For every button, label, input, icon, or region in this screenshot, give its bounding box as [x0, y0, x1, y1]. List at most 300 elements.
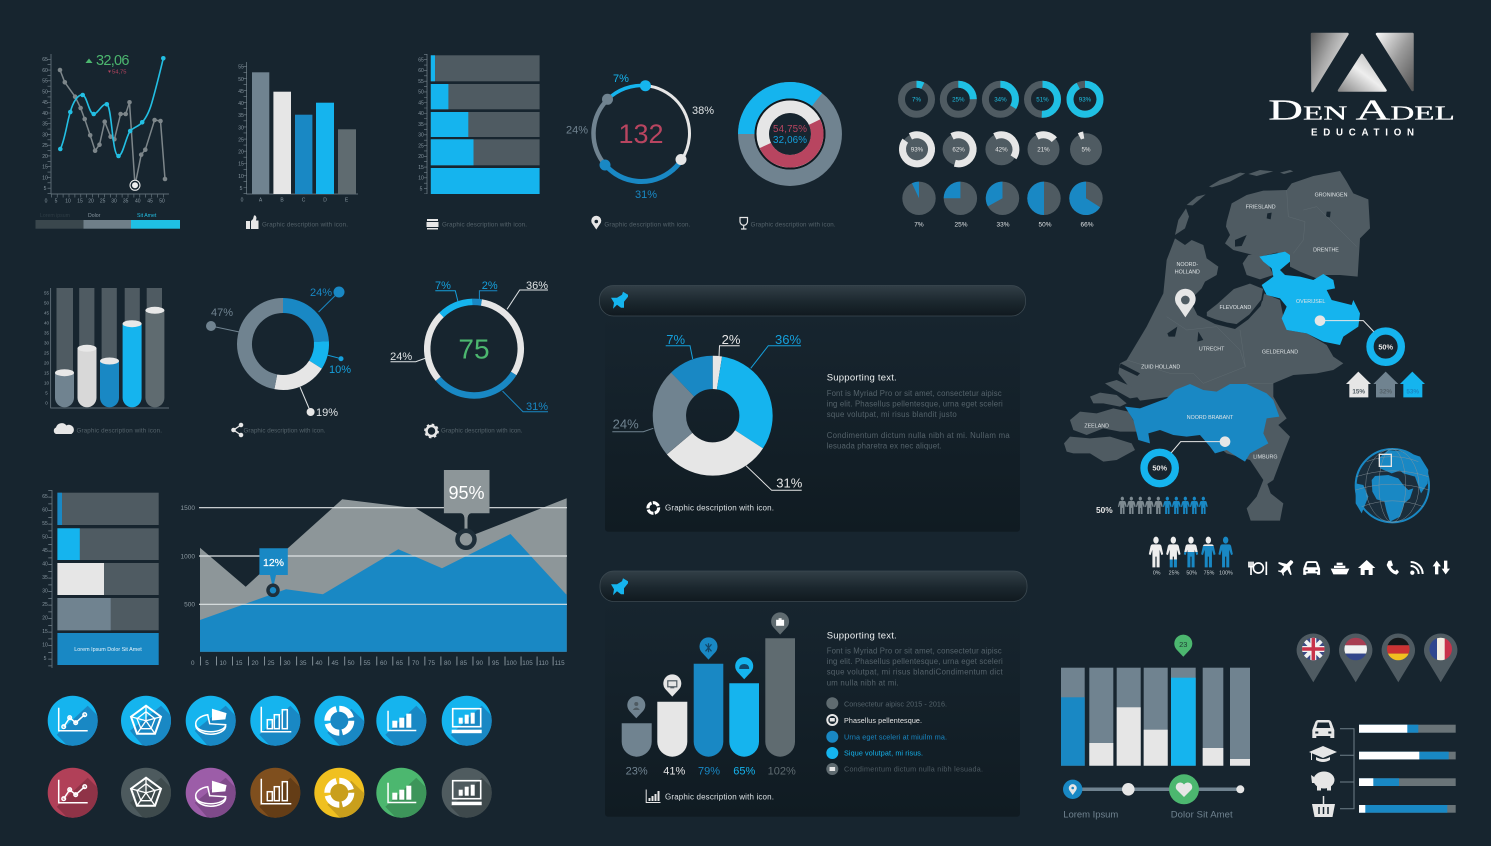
province labels: FLEVOLAND: [1219, 305, 1251, 311]
supporting body: ing elit. Phasellus pellentesque, urna eget sceleri: [827, 657, 1003, 666]
y labels: [238, 65, 349, 204]
pie labels: 33%: [996, 222, 1010, 228]
icon: globe: [1356, 449, 1429, 522]
x axis labels: 50: [159, 198, 165, 204]
y labels: E: [345, 198, 349, 204]
caption: Graphic description with icon.: [441, 427, 523, 434]
y labels: 40: [238, 101, 244, 107]
y labels: 40: [42, 562, 48, 568]
icon: car: [1303, 561, 1320, 575]
zeeland islands: [1064, 380, 1142, 462]
x labels: 55: [363, 660, 371, 667]
donut labels: 36%: [775, 332, 801, 347]
y labels: 20: [418, 154, 424, 160]
donut labels: 24%: [613, 416, 639, 432]
y labels: 55: [238, 65, 244, 71]
y axis labels: 45: [42, 100, 48, 106]
lakes: [1119, 212, 1331, 376]
y labels: D: [323, 198, 327, 204]
legend: Sit Amet: [137, 213, 157, 219]
bars: [252, 72, 356, 194]
icon: cloud: [54, 423, 74, 434]
panel: area chart: [181, 470, 568, 667]
y axis labels: 20: [42, 154, 48, 160]
panel: double ring: [740, 90, 836, 229]
value up: 32,06: [96, 53, 130, 69]
pies: [902, 182, 1103, 215]
dial labels: 62%: [952, 146, 965, 154]
icon: phone: [1387, 560, 1399, 575]
y labels: 1500: [181, 505, 195, 512]
donut: [651, 354, 774, 477]
panel: donut with callouts: [206, 286, 351, 437]
grey area: [200, 498, 567, 652]
x axis labels: 5: [55, 198, 58, 204]
flag pin: Germany: [1382, 633, 1415, 682]
supporting body: lesuada pharetra ex nec aliquet.: [827, 441, 942, 450]
panel: cylinder chart: [44, 288, 169, 434]
panel: icon buttons colored row: [48, 768, 492, 818]
bar: savings: [1359, 778, 1456, 786]
province labels: UTRECHT: [1199, 346, 1225, 352]
bar pins: [627, 612, 789, 718]
province labels: OVERIJSEL: [1296, 299, 1325, 305]
header pill: [600, 571, 1027, 602]
y labels: 25: [42, 602, 48, 608]
bracket: [1340, 729, 1354, 809]
province borders: [1127, 190, 1357, 383]
icon: calendar: [426, 219, 438, 230]
y labels: 55: [418, 79, 424, 85]
icon: bar chart green: [376, 768, 426, 818]
y labels: 25: [44, 350, 49, 356]
icon: bars: [646, 790, 660, 803]
callout: 95%: 95%: [448, 483, 485, 503]
wadden islands: [1175, 170, 1293, 235]
province labels: HOLLAND: [1175, 270, 1200, 276]
grid lines: [199, 508, 567, 604]
panel: horizontal progress bars: [418, 54, 540, 230]
y labels: 0: [45, 400, 48, 406]
axis: [51, 288, 169, 408]
center value: 75: [458, 334, 490, 364]
icon: monitor: [442, 696, 492, 746]
cylinders: [55, 307, 164, 407]
y labels: 5: [45, 390, 48, 396]
ring labels: 24%: [566, 124, 588, 136]
y labels: 10: [238, 174, 244, 180]
x labels: 105: [522, 660, 533, 667]
cyan ring labels: 7%: [912, 96, 921, 104]
y labels: 15: [238, 162, 244, 168]
globe marker: [1379, 454, 1391, 466]
x axis labels: 40: [135, 198, 141, 204]
logo tagline: EDUCATION: [1311, 128, 1414, 138]
supporting heading: Supporting text.: [827, 630, 897, 641]
cyan rings: [902, 84, 1100, 114]
x labels: [191, 660, 565, 667]
x ticks: [200, 656, 568, 666]
y labels: 10: [418, 176, 424, 182]
icon: bar chart: [376, 696, 426, 746]
bar: education: [1359, 752, 1456, 759]
panel: map of the Netherlands: [1064, 170, 1450, 576]
globe land: [1356, 450, 1428, 522]
people row: [1118, 497, 1208, 514]
y labels: 45: [238, 89, 244, 95]
noordoostpolder: [1243, 253, 1273, 279]
icon: bars brown: [250, 768, 300, 818]
marker: [130, 180, 140, 190]
ring labels: 7%: [435, 280, 451, 292]
legend: Lorem ipsum: [40, 213, 70, 219]
icon: thumb up: [246, 215, 258, 229]
inner ring: [754, 98, 826, 170]
x axis labels: [45, 198, 165, 204]
logo: [1268, 34, 1455, 138]
icon: cutlery: [1249, 562, 1266, 575]
panel: stacked columns with timeline: [1061, 635, 1250, 821]
x labels: 85: [460, 660, 467, 667]
caption: Graphic description with icon.: [665, 504, 774, 513]
timeline labels: Lorem Ipsum: [1063, 810, 1118, 821]
timeline heart marker: [1169, 774, 1199, 804]
callout: noord brabant: 50%: [1152, 464, 1167, 473]
axis: [245, 62, 358, 194]
caption: Graphic description with icon.: [244, 427, 326, 434]
y labels: 45: [418, 100, 424, 106]
pie labels: 50%: [1038, 222, 1052, 228]
header pill: [600, 286, 1026, 316]
ring dots: [600, 80, 686, 170]
callout labels: 19%: [316, 407, 338, 419]
y labels: 25: [238, 138, 244, 144]
y labels: 30: [418, 132, 424, 138]
dial labels: 93%: [911, 146, 924, 154]
pie labels: 7%: [914, 222, 924, 228]
x labels: 30: [283, 660, 291, 667]
people progress labels: 25%: [1169, 570, 1180, 576]
panel: stacked progress rows: [42, 490, 159, 668]
y labels: 40: [418, 111, 424, 117]
logo name: DEN ADEL: [1268, 94, 1455, 126]
y labels: 35: [44, 330, 49, 336]
x labels: 80: [444, 660, 451, 667]
icon: up down arrows: [1433, 561, 1450, 574]
icon: car: [1312, 720, 1334, 738]
supporting body: [827, 389, 1010, 450]
caption: Graphic description with icon.: [604, 221, 691, 228]
icon: radar grey: [121, 768, 171, 818]
supporting body: Font is Myriad Pro or sit amet, consectetur aipisc: [827, 647, 1002, 656]
province labels: GRONINGEN: [1315, 193, 1348, 199]
western and central provinces: [1118, 238, 1343, 521]
y labels: 65: [42, 494, 48, 500]
noord brabant: [1125, 384, 1279, 462]
chart axes: [49, 54, 169, 196]
callout labels: [211, 287, 351, 419]
x labels: 5: [205, 660, 209, 667]
province labels: ZEELAND: [1084, 424, 1109, 430]
panel: category progress bars: [1309, 720, 1456, 817]
y labels: A: [259, 198, 263, 204]
x axis labels: 35: [123, 198, 129, 204]
overijssel: [1259, 252, 1360, 345]
pie labels: 66%: [1080, 222, 1094, 228]
cyan ring labels: 93%: [1079, 96, 1092, 104]
bar values: 41%: [663, 766, 686, 778]
x axis labels: 0: [45, 198, 48, 204]
supporting body: sque volutpat, mi risus blandit justo: [827, 410, 957, 419]
ring labels: 38%: [692, 105, 714, 117]
x labels: 110: [538, 660, 549, 667]
flag pin: France: [1424, 633, 1457, 682]
icon: gear: [425, 424, 438, 438]
white arc dials: [897, 130, 1106, 169]
province labels: NOORD BRABANT: [1187, 415, 1234, 421]
y axis labels: 40: [42, 111, 48, 117]
icon: graduation cap: [1309, 746, 1337, 762]
panel: country flag pins: [1297, 633, 1457, 682]
legend list: Condimentum dictum nulla nibh lesuada.: [844, 764, 983, 774]
y labels: 30: [42, 588, 48, 594]
column fills: [1061, 678, 1250, 766]
icon: donut yellow: [314, 768, 364, 818]
y axis labels: 35: [42, 122, 48, 128]
supporting heading: Supporting text.: [827, 373, 897, 384]
flag pin: UK: [1297, 633, 1330, 682]
center values: [773, 124, 807, 146]
grey data line: [58, 68, 167, 185]
globe grid: [1356, 449, 1429, 522]
x labels: 40: [315, 660, 323, 667]
panel: line chart: [36, 53, 180, 229]
blue area: [200, 534, 567, 652]
y axis labels: 50: [42, 89, 48, 95]
green pin: 23: [1179, 640, 1187, 649]
province labels: ZUID HOLLAND: [1141, 364, 1180, 370]
x labels: 10: [219, 660, 227, 667]
houses: 15%: [1352, 389, 1365, 396]
x axis labels: 30: [111, 198, 117, 204]
x labels: 70: [412, 660, 419, 667]
province labels: GELDERLAND: [1262, 350, 1298, 356]
y labels: 20: [44, 360, 49, 366]
y labels: B: [280, 198, 284, 204]
y labels: 20: [42, 616, 48, 622]
caption: Graphic description with icon.: [442, 221, 527, 228]
rows: [57, 493, 159, 665]
people progress labels: 100%: [1219, 570, 1233, 576]
ring: [408, 283, 540, 415]
y axis labels: 65: [42, 57, 48, 63]
green pin: [1174, 635, 1192, 657]
y labels: 50: [42, 534, 48, 540]
houses: [1346, 372, 1425, 397]
ring labels: 31%: [635, 189, 657, 201]
y labels: 55: [44, 290, 49, 296]
cyan ring labels: [912, 96, 1092, 104]
bar values: 79%: [698, 766, 720, 778]
bars: [431, 55, 540, 194]
y labels: 15: [418, 165, 424, 171]
ring labels: [566, 73, 714, 201]
dial labels: 42%: [995, 146, 1008, 154]
y labels: 5: [44, 656, 47, 662]
donut leader lines: [612, 346, 802, 490]
people row label: 50%: [1096, 505, 1113, 515]
callout labels: 10%: [329, 364, 351, 376]
icon: pie purple: [186, 768, 236, 818]
ring labels: 31%: [526, 401, 548, 413]
y axis labels: 60: [42, 68, 48, 74]
ring labels: 36%: [526, 280, 548, 292]
y labels: 50: [238, 77, 244, 83]
y labels: 5: [420, 186, 423, 192]
y labels: 15: [42, 629, 48, 635]
y labels: 500: [184, 602, 195, 609]
y labels: 35: [238, 113, 244, 119]
icon: bars: [250, 696, 300, 746]
x labels: 65: [396, 660, 403, 667]
y labels: 60: [418, 68, 424, 74]
x labels: 35: [299, 660, 307, 667]
icon: line chart red: [48, 768, 98, 818]
panel background: [605, 601, 1020, 817]
supporting body: ing elit. Phasellus pellentesque, urna eget sceleri: [827, 399, 1003, 408]
icon: plane: [1278, 560, 1293, 576]
supporting body: [827, 647, 1004, 687]
icon: rss: [1411, 562, 1423, 574]
x labels: 20: [251, 660, 259, 667]
y axis labels: 30: [42, 132, 48, 138]
bar values: 65%: [733, 766, 756, 778]
x axis labels: 10: [65, 198, 71, 204]
ring labels: 24%: [390, 351, 412, 363]
y labels: 45: [44, 310, 49, 316]
cyan ring labels: 51%: [1036, 96, 1049, 104]
flag pin: Netherlands: [1339, 633, 1372, 682]
bar values: [626, 766, 796, 778]
y axis labels: [42, 57, 48, 192]
icon: ship: [1331, 563, 1349, 574]
people progress labels: [1153, 570, 1233, 576]
donut: [230, 291, 336, 397]
x labels: 25: [267, 660, 275, 667]
x axis labels: 45: [147, 198, 153, 204]
y labels: 0: [241, 198, 244, 204]
legend list: [826, 697, 983, 775]
province labels: FRIESLAND: [1246, 204, 1276, 210]
y labels: 35: [418, 122, 424, 128]
panel: pill bars with supporting text: [600, 571, 1027, 817]
caption: Graphic description with icon.: [665, 792, 774, 801]
callout: noord brabant: [1144, 436, 1230, 484]
y labels: 25: [418, 143, 424, 149]
icon: pin: [611, 578, 628, 595]
bar: shopping: [1359, 805, 1456, 813]
y labels: 40: [44, 320, 49, 326]
caption: Graphic description with icon.: [76, 427, 162, 434]
y labels: [44, 290, 49, 406]
supporting body: sque volutpat, mi risus blandiCondimentum dict: [827, 667, 1004, 676]
panel background: [605, 316, 1020, 532]
icon: basket: [1312, 796, 1335, 817]
flevoland: [1206, 283, 1264, 325]
x labels: 100: [506, 660, 517, 667]
pie labels: 25%: [954, 222, 968, 228]
icon: monitor grey: [442, 768, 492, 818]
dial labels: 21%: [1037, 146, 1050, 154]
province labels: NOORD-: [1177, 262, 1198, 268]
panel: small progress rings: [897, 84, 1106, 228]
x labels: 115: [555, 660, 565, 667]
bars: [622, 638, 795, 757]
y labels: 10: [44, 380, 49, 386]
globe ocean: [1356, 449, 1429, 522]
bar values: 102%: [768, 766, 796, 778]
icon: piggy bank: [1311, 772, 1334, 790]
callout dots: [206, 286, 344, 416]
x axis labels: 15: [77, 198, 83, 204]
y axis labels: 10: [42, 175, 48, 181]
y labels: 30: [44, 340, 49, 346]
supporting body: um nulla nibh at mi.: [827, 678, 899, 687]
callout: 95%: [444, 470, 490, 548]
callout labels: 47%: [211, 307, 233, 319]
panel: icon buttons blue row: [48, 696, 492, 746]
x labels: 60: [380, 660, 387, 667]
panel: donut with supporting text: [600, 286, 1026, 532]
icon: line chart: [48, 696, 98, 746]
x labels: 95: [492, 660, 499, 667]
donut labels: [613, 332, 803, 490]
supporting body: Font is Myriad Pro or sit amet, consectetur aipisc: [827, 389, 1002, 398]
panel: 75 ring: [390, 280, 548, 438]
x labels: 90: [476, 660, 483, 667]
y labels: 10: [42, 642, 48, 648]
houses: 53%: [1406, 389, 1419, 396]
x labels: 50: [347, 660, 355, 667]
x axis labels: 20: [88, 198, 94, 204]
callout: overijssel: [1315, 315, 1401, 362]
north-east provinces: [1225, 171, 1370, 278]
x axis labels: 25: [100, 198, 106, 204]
caption: Graphic description with icon.: [751, 221, 836, 228]
y axis labels: 55: [42, 78, 48, 84]
blue data line: [58, 56, 166, 158]
icon: location pin: [591, 216, 601, 230]
icon: share: [232, 423, 243, 437]
x labels: 0: [191, 660, 195, 667]
y labels: C: [302, 198, 306, 204]
ring labels: 2%: [482, 280, 498, 292]
axis: [426, 54, 427, 194]
cyan ring labels: 34%: [994, 96, 1007, 104]
legend list: Sique volutpat, mi risus.: [844, 748, 923, 758]
y labels: [418, 57, 424, 192]
callout: overijssel: 50%: [1378, 342, 1393, 351]
icon: home: [1358, 560, 1375, 575]
icon: pin: [611, 292, 628, 309]
ring labels: [390, 280, 548, 413]
icon: donut: [314, 696, 364, 746]
people progress labels: 0%: [1153, 570, 1161, 576]
y labels: [42, 494, 48, 662]
outer ring: [746, 90, 834, 178]
pie labels: [914, 222, 1094, 228]
callout lines: [211, 295, 341, 412]
